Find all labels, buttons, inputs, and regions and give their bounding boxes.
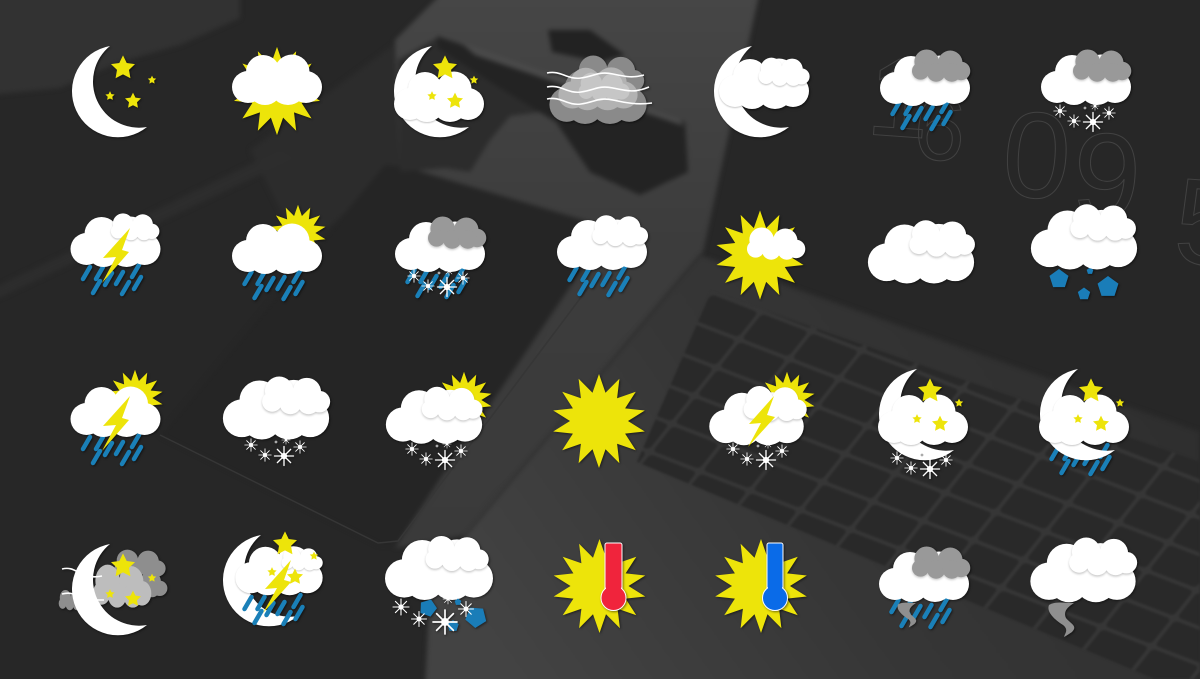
icon: night rain (1039, 369, 1129, 474)
icon: snow with dark cloud (1041, 49, 1131, 132)
icon: rain with tornado (879, 546, 970, 627)
icon: tornado (1030, 538, 1137, 637)
clock digits on laptop screen: 9 (1068, 106, 1145, 247)
clock digits on laptop screen: 0 (998, 85, 1075, 226)
icon: snow and hail (385, 536, 493, 634)
icon: hail (1031, 204, 1137, 299)
icon: cloudy night (714, 46, 810, 137)
icon: sun and thunderstorm (70, 370, 162, 464)
icon: sun behind small cloud (716, 210, 805, 300)
icon: cold temperature (715, 539, 807, 633)
icon: sun and snow (386, 372, 491, 470)
icon: night snow (878, 369, 968, 478)
icon: rain (557, 215, 648, 295)
clock digits on laptop screen: 6 (911, 76, 969, 182)
icon: night fog (59, 544, 167, 635)
icon: sun, thunder and snow (709, 372, 814, 470)
icon: fog (547, 56, 652, 124)
clock digits on laptop screen (863, 33, 1200, 293)
clock digits on laptop screen: 1 (863, 33, 934, 162)
icon: partly cloudy day (232, 47, 322, 135)
icon: snow (223, 377, 330, 466)
icon: rain and snow with dark cloud (395, 216, 486, 297)
icon: hot temperature (554, 539, 645, 633)
icon: night thunderstorm (223, 531, 323, 626)
icon: sun and rain (232, 205, 325, 299)
icon: rain with dark cloud (880, 49, 970, 129)
icon: thunderstorm (70, 213, 160, 294)
icon: overcast (868, 220, 975, 284)
icon: clear sun (553, 374, 645, 468)
icon: partly cloudy night (394, 46, 484, 137)
icon: clear night, moon and stars (72, 46, 156, 137)
